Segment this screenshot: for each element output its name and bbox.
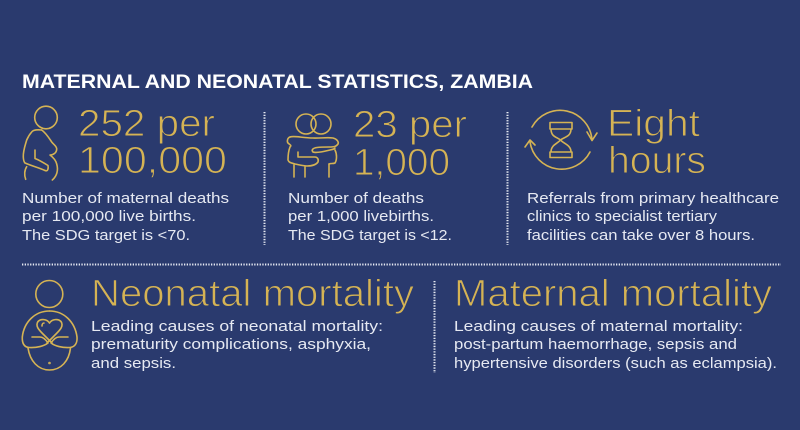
stat: eight hours: Eight [607, 103, 700, 145]
text: neonatal causes: prematurity complications, asphyxia, [91, 337, 371, 353]
text: neonatal deaths description: per 1,000 livebirths. [288, 209, 434, 225]
text: neonatal deaths description [288, 191, 452, 244]
text: maternal deaths description [22, 191, 229, 244]
panel: neonatal deaths [287, 104, 467, 244]
text: maternal causes: Leading causes of maternal mortality: [454, 319, 743, 335]
stat: 23 per 1,000: 1,000 [353, 142, 450, 184]
panel: referral time [525, 103, 779, 244]
title: MATERNAL AND NEONATAL STATISTICS, ZAMBIA [22, 72, 533, 93]
text: maternal deaths description: per 100,000 live births. [22, 209, 196, 225]
stat: 23 per 1,000 [353, 104, 467, 184]
stat: eight hours: hours [608, 140, 706, 182]
text: referral description: facilities can take over 8 hours. [527, 228, 755, 244]
text: maternal causes [454, 319, 777, 372]
text: maternal causes: post-partum haemorrhage, sepsis and [454, 337, 737, 353]
heading: maternal mortality: Maternal mortality [454, 273, 772, 315]
text: maternal deaths description: Number of maternal deaths [22, 191, 229, 207]
text: maternal causes: hypertensive disorders (such as eclampsia). [454, 356, 777, 372]
panel: neonatal mortality [22, 273, 414, 372]
stat: 252 per 100,000: 252 per [78, 103, 215, 145]
text: referral description: clinics to specialist tertiary [527, 209, 718, 225]
text: neonatal causes [91, 319, 383, 372]
icon: hourglass with cycle arrows [525, 110, 597, 169]
text: neonatal deaths description: Number of deaths [288, 191, 424, 207]
heading: neonatal mortality: Neonatal mortality [91, 273, 414, 315]
stat: 252 per 100,000: 100,000 [78, 140, 227, 182]
panel: maternal deaths [22, 103, 229, 244]
text: referral description [527, 191, 779, 244]
text: referral description: Referrals from primary healthcare [527, 191, 779, 207]
icon: mother holding heart [22, 280, 77, 370]
text: maternal deaths description: The SDG target is <70. [22, 228, 190, 244]
text: neonatal causes: Leading causes of neonatal mortality: [91, 319, 383, 335]
stat: eight hours [607, 103, 706, 182]
stat: 23 per 1,000: 23 per [353, 104, 467, 146]
icon: pregnant woman [23, 106, 57, 180]
icon: embracing couple [287, 114, 338, 177]
text: neonatal deaths description: The SDG target is <12. [288, 228, 452, 244]
stat: 252 per 100,000 [78, 103, 227, 182]
text: neonatal causes: and sepsis. [91, 356, 176, 372]
panel: maternal mortality [454, 273, 777, 372]
